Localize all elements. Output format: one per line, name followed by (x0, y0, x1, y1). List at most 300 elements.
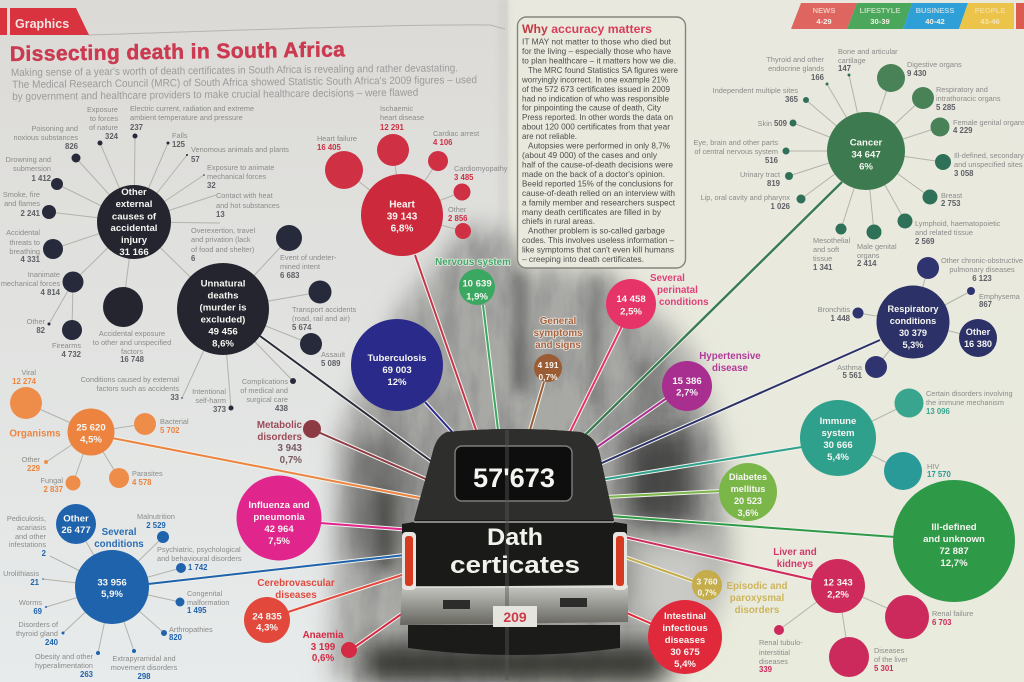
bubble: metabolic disorders: Metabolic (257, 420, 302, 431)
bubble: influenza and pneumonia: 7,5% (268, 536, 290, 547)
hub: heart (361, 174, 443, 256)
labels: several conditions: 820 (169, 633, 183, 642)
labels: respiratory: pulmonary diseases (949, 265, 1015, 274)
callout: why accuracy matters: a family member and researchers suspect (522, 197, 676, 207)
labels: external causes: mechanical forces (207, 172, 267, 181)
labels: heart: 2 856 (448, 214, 468, 223)
hub: liver: 12 343 (823, 578, 853, 588)
bubble: hypertensive disease: 2,7% (676, 388, 698, 398)
labels: cancer: 9 430 (907, 69, 927, 78)
line: intestinal (620, 610, 652, 624)
line: several conditions (148, 555, 405, 584)
callout: why accuracy matters: Press reported. In other words the data on (522, 112, 673, 122)
labels: external causes: Accidental (6, 228, 40, 237)
labels: external causes: 4 331 (20, 255, 41, 264)
hub: unnatural deaths: 49 456 (208, 326, 238, 338)
labels: several conditions: acariasis (17, 523, 46, 532)
bubble: nervous system: 10 639 (462, 278, 492, 290)
hub: heart: 6,8% (391, 224, 414, 234)
bubble: hypertensive disease (662, 351, 761, 411)
labels: unnatural deaths: Event of undeter- (280, 253, 336, 262)
labels: cancer: Respiratory and (936, 85, 988, 94)
labels: respiratory: Asthma (837, 363, 862, 372)
labels: external causes: Poisoning and (31, 124, 78, 133)
bubble: accidental exposure (93, 287, 171, 364)
labels: liver: 6 703 (932, 618, 952, 627)
licence plate: 209 (503, 609, 527, 625)
labels: cancer: 4 229 (953, 126, 973, 135)
labels: cancer: Eye, brain and other parts (693, 138, 778, 147)
hearse (400, 429, 628, 680)
labels: several conditions: 1 742 (188, 563, 208, 572)
labels: unnatural deaths: surgical care (246, 395, 288, 404)
line: heart (415, 255, 476, 430)
line: nervous system (483, 305, 498, 430)
callout: why accuracy matters: made on the back of a doctor's opinion. (522, 169, 665, 179)
licence plate (493, 606, 537, 627)
labels: external causes: to forces (90, 114, 118, 123)
bubble: episodic and paroxysmal disorders: disorders (735, 605, 780, 616)
bubble: cerebrovascular diseases: diseases (275, 590, 317, 601)
labels: unnatural deaths: 33 (170, 393, 180, 402)
hub: heart: 39 143 (387, 212, 418, 222)
navigation tabs: BUSINESS (916, 6, 954, 15)
hub: cancer: 34 647 (851, 150, 881, 160)
labels: several conditions: Pediculosis, (7, 514, 46, 523)
callout: why accuracy matters: Another problem is so-called garbage (528, 226, 665, 236)
line: unnatural deaths (260, 336, 432, 462)
labels: unnatural deaths: Assault (321, 350, 345, 359)
labels: several conditions: Worms (19, 598, 42, 607)
line: diabetes (605, 491, 722, 497)
labels: external causes: of food and shelter) (191, 245, 254, 254)
bubble: general symptoms and signs: 4 191 (538, 360, 558, 370)
labels: external causes: noxious substances (13, 133, 78, 142)
bubble: accidental exposure: to other and unspecified (93, 338, 171, 347)
hub: other external causes: external (116, 199, 152, 210)
panel: immune system (800, 388, 1013, 490)
bubble: influenza and pneumonia (236, 476, 322, 560)
labels: cancer: and unspecified sites (954, 160, 1023, 169)
labels: external causes: Exposure to animate (207, 163, 274, 172)
hub: organisms: 4,5% (80, 434, 102, 446)
line: cancer (582, 182, 842, 438)
labels: cancer: 3 058 (954, 169, 974, 178)
bubble: accidental exposure: Accidental exposure (99, 329, 165, 338)
labels: several conditions: hyperalimentation (35, 661, 93, 670)
bubble: nervous system (435, 257, 511, 305)
bubble: hypertensive disease: disease (712, 363, 749, 374)
labels: several conditions: Several (102, 527, 136, 538)
callout: why accuracy matters: cause-of-death relied on an interview with (522, 188, 675, 198)
bubble: diabetes mellitus: Diabetes (729, 472, 767, 482)
labels: external causes: Falls (172, 131, 188, 140)
labels: organisms: 5 702 (160, 426, 180, 435)
labels: cancer: tissue (813, 254, 832, 263)
labels: cancer: and soft (813, 245, 839, 254)
labels: heart: 3 485 (454, 173, 474, 182)
labels: cancer: intrathoracic organs (936, 94, 1001, 103)
labels: unnatural deaths: Conditions caused by external (81, 375, 179, 384)
labels: several conditions: movement disorders (111, 663, 178, 672)
bubble: episodic and paroxysmal disorders: 3 760 (697, 576, 717, 586)
callout: why accuracy matters (518, 17, 686, 268)
labels: cancer: Thyroid and other (766, 55, 824, 64)
labels: organisms (9, 368, 189, 494)
bubble: general symptoms and signs: 0,7% (538, 372, 558, 382)
labels: cancer: 1 341 (813, 263, 833, 272)
callout: why accuracy matters: Beeld reported 15% of the conclusions for (522, 178, 673, 188)
hub: immune: 5,4% (827, 452, 849, 463)
bubble: several perinatal conditions: conditions (659, 297, 709, 308)
labels: cancer: organs (857, 251, 880, 260)
bubble: diabetes mellitus: 3,6% (738, 508, 758, 518)
labels: heart: Cardiac arrest (433, 129, 479, 138)
line: tuberculosis (425, 402, 454, 434)
callout: why accuracy matters: like symptoms that can't even kill humans (522, 245, 674, 255)
labels: organisms: Viral (21, 368, 36, 377)
bubble: several perinatal conditions: Several (650, 273, 685, 284)
header rule (88, 25, 505, 35)
bubble: hypertensive disease: Hypertensive (699, 351, 761, 362)
labels: several conditions: 2 529 (146, 521, 166, 530)
labels: heart: 16 405 (317, 143, 342, 152)
hub: other external causes: Other (121, 187, 147, 198)
labels: liver: Liver and (773, 547, 817, 558)
hub: several conditions: 33 956 (97, 578, 127, 588)
labels: unnatural deaths: mined intent (280, 262, 320, 271)
bubble: other respiratory: Other (966, 327, 990, 337)
labels: several conditions: Congenital (187, 589, 222, 598)
labels: external causes: Other (27, 317, 45, 326)
line: hypertensive (590, 398, 667, 452)
labels: cancer: Breast (941, 191, 962, 200)
callout: why accuracy matters: of the 572 673 certificates issued in 2009 (522, 84, 670, 94)
hub: other external causes (97, 185, 171, 259)
labels: cancer: 819 (767, 179, 781, 188)
bubble: metabolic disorders: 0,7% (280, 455, 302, 466)
labels: unnatural deaths: self-harm (195, 396, 226, 405)
labels: external causes: 32 (207, 181, 216, 190)
bubble: accidental exposure: factors (121, 347, 143, 356)
callout: why accuracy matters: many death certificates are filled in by (522, 207, 662, 217)
intro text: The Medical Research Council (MRC) of South Africa showed Statistic South Africa's 2009 figures – used (12, 74, 477, 91)
hub: respiratory: 30 379 (899, 328, 927, 338)
bubble: anaemia: 3 199 (311, 642, 336, 653)
callout: why accuracy matters: codes. This involves useless information – (522, 235, 674, 245)
bubble: episodic and paroxysmal disorders: Episodic and (727, 581, 787, 592)
labels: external causes (1, 104, 289, 359)
bubble: anaemia: Anaemia (303, 630, 343, 641)
labels: external causes: Electric current, radiation and extreme (130, 104, 254, 113)
intro text (11, 62, 477, 103)
navigation tabs: 40-42 (925, 17, 945, 26)
callout: why accuracy matters: Autopsies were performed in only 8,7% (528, 141, 670, 151)
labels: external causes: Inanimate (28, 270, 60, 279)
navigation tabs: NEWS (813, 6, 835, 15)
labels: heart (317, 104, 508, 223)
labels: heart: Heart failure (317, 134, 357, 143)
labels: several conditions: Obesity and other (35, 652, 93, 661)
labels: several conditions: Disorders of (18, 620, 58, 629)
labels: heart: Cardiomyopathy (454, 164, 507, 173)
labels: external causes: 237 (130, 123, 143, 132)
labels: external causes: Drowning and (6, 155, 51, 164)
bubble: ill-defined and unknown: 72 887 (939, 546, 969, 557)
bubble: anaemia: 0,6% (312, 653, 334, 664)
bubble: general symptoms and signs: General (540, 316, 576, 327)
hub: unnatural deaths: (murder is (200, 302, 246, 314)
labels: several conditions: Arthropathies (169, 625, 213, 634)
labels: cancer: and related tissue (915, 228, 973, 237)
labels: immune: 13 096 (926, 407, 951, 416)
labels: cancer: 2 414 (857, 259, 877, 268)
hub: several conditions: 5,9% (101, 589, 123, 600)
labels: cancer: 365 (785, 95, 799, 104)
labels: several conditions: Psychiatric, psychological (157, 545, 241, 554)
labels: several conditions: 69 (33, 607, 43, 616)
labels: several conditions: 263 (80, 670, 94, 679)
labels: unnatural deaths: 438 (275, 404, 289, 413)
labels: external causes: and hot substances (216, 201, 280, 210)
labels: external causes: Venomous animals and plants (191, 145, 289, 154)
labels: external causes: threats to (9, 238, 40, 247)
labels: respiratory: 6 123 (972, 274, 992, 283)
panel: other external causes of accidental injury (1, 104, 289, 364)
hub: cancer: Cancer (850, 138, 882, 148)
labels: cancer: of central nervous system (694, 147, 778, 156)
bubble: anaemia (303, 630, 357, 664)
labels: external causes: 826 (65, 142, 79, 151)
labels: unnatural deaths: of medical and (240, 386, 288, 395)
bubble: metabolic disorders (257, 420, 321, 466)
labels: cancer: Mesothelial (813, 236, 850, 245)
labels: liver: diseases (759, 657, 788, 666)
labels: unnatural deaths (81, 253, 357, 414)
labels: external causes: Contact with heat (216, 191, 273, 200)
bubble: other: Other (63, 514, 89, 524)
labels: respiratory: 1 448 (830, 314, 851, 323)
labels: cancer: 147 (838, 64, 851, 73)
labels: several conditions: and other (15, 532, 47, 541)
labels: organisms: 12 274 (12, 377, 37, 386)
hearse text: Dath (487, 524, 543, 551)
hub: other external causes: accidental (111, 223, 157, 234)
hub: other external causes: causes of (112, 212, 157, 222)
labels: external causes: 2 241 (20, 209, 41, 218)
intro text: Making sense of a year's worth of death certificates in South Africa is revealing and rather devastating. (11, 62, 458, 79)
bubble: influenza and pneumonia: pneumonia (253, 512, 305, 523)
bubble: cerebrovascular diseases (244, 578, 335, 643)
navigation tabs (791, 3, 1024, 29)
labels: unnatural deaths: factors such as accidents (97, 384, 179, 393)
labels: unnatural deaths: 6 683 (280, 271, 300, 280)
labels: cancer: Skin 509 (758, 119, 788, 128)
hub: respiratory (876, 286, 950, 358)
labels: external causes: of nature (89, 123, 118, 132)
bubble: episodic and paroxysmal disorders (692, 570, 787, 616)
labels: several conditions: Urolithiasis (3, 569, 39, 578)
callout: why accuracy matters: are not reliable. (522, 131, 577, 141)
labels: liver: 5 301 (874, 664, 894, 673)
labels: immune: 17 570 (927, 470, 952, 479)
labels: external causes: Overexertion, travel (191, 226, 255, 235)
navigation tabs: 30-39 (870, 17, 890, 26)
labels: unnatural deaths: (road, rail and air) (292, 314, 350, 323)
labels: cancer: 166 (811, 73, 825, 82)
bubble: cerebrovascular diseases: Cerebrovascular (257, 578, 335, 589)
labels: liver: Renal failure (932, 609, 973, 618)
hub: unnatural deaths: 8,6% (212, 338, 234, 350)
labels: immune: Certain disorders involving (926, 389, 1013, 398)
bubble: general symptoms and signs (534, 316, 583, 382)
labels: unnatural deaths: Intentional (192, 387, 226, 396)
labels: liver (759, 547, 973, 674)
labels: several conditions: 2 (42, 549, 47, 558)
labels: immune: the immune mechanism (926, 398, 1004, 407)
labels: organisms: Other (22, 455, 40, 464)
labels: liver: Renal tubulo- (759, 638, 803, 647)
labels: external causes: 4 814 (40, 288, 61, 297)
bubble: intestinal infectious diseases: infectious (662, 623, 708, 634)
labels: cancer: endocrine glands (768, 64, 824, 73)
labels: liver: 339 (759, 665, 773, 674)
labels: unnatural deaths: Transport accidents (292, 305, 356, 314)
bubble: general symptoms and signs: and signs (535, 340, 581, 351)
labels: external causes: breathing (9, 247, 40, 256)
labels: organisms: 2 837 (43, 485, 63, 494)
navigation tabs: 4-29 (816, 17, 832, 26)
labels: several conditions: thyroid gland (16, 629, 58, 638)
hub: liver: 2,2% (827, 590, 849, 600)
bubble: tuberculosis: 69 003 (382, 365, 412, 376)
callout: why accuracy matters: half of the cause-of-death decisions were (522, 160, 673, 170)
labels: external causes: ambient temperature and pressure (130, 113, 243, 122)
labels: cancer: Lymphoid, haematopoietic (915, 219, 1000, 228)
bubble: intestinal infectious diseases: 30 675 (670, 647, 700, 658)
bubble: several perinatal conditions: 14 458 (616, 294, 646, 305)
labels: organisms: Parasites (132, 469, 163, 478)
labels: heart: Other (448, 205, 466, 214)
bubble: intestinal infectious diseases: 5,4% (674, 659, 696, 670)
hub: respiratory: Respiratory (887, 304, 939, 314)
labels: respiratory: 5 561 (842, 371, 863, 380)
hub: other external causes: injury (121, 235, 148, 246)
callout: why accuracy matters: had no indication of who was responsible (522, 93, 669, 103)
intro text: by government and healthcare providers to make crucial healthcare decisions – were flawed (12, 87, 418, 103)
callout: why accuracy matters: IT MAY not matter to those who died but (522, 36, 672, 46)
callout: why accuracy matters: – creeping into death certificates. (522, 254, 644, 264)
labels: respiratory: 867 (979, 300, 992, 309)
hub: organisms (68, 408, 114, 456)
line: episodic (622, 556, 696, 582)
panel: several conditions (3, 504, 242, 681)
navigation tabs: 43-46 (980, 17, 1000, 26)
line: organisms (112, 438, 420, 498)
labels: external causes: 4 732 (61, 350, 82, 359)
panel: heart (317, 104, 508, 256)
labels: liver: Diseases (874, 646, 904, 655)
labels: cancer: Male genital (857, 242, 897, 251)
hub: other external causes: 31 166 (119, 247, 149, 258)
bubble: other respiratory: 16 380 (964, 339, 992, 349)
labels: unnatural deaths: Complications (242, 377, 288, 386)
hub: unnatural deaths: Unnatural (201, 278, 245, 290)
labels: external causes: and flames (4, 199, 40, 208)
line: anaemia (352, 608, 410, 649)
line: respiratory (595, 340, 880, 466)
labels: external causes: 57 (191, 155, 200, 164)
panel: respiratory conditions (818, 256, 1023, 380)
taillights (402, 532, 627, 590)
callout: why accuracy matters: Why accuracy matters (522, 22, 652, 36)
navigation tabs: PEOPLE (975, 6, 1005, 15)
callout: why accuracy matters: for the living – especially those who have (522, 46, 671, 56)
labels: respiratory: Bronchitis (818, 305, 850, 314)
labels: organisms: Fungal (41, 476, 63, 485)
labels: several conditions: Malnutrition (137, 512, 175, 521)
bubble: other respiratory (959, 319, 997, 357)
panel: liver and kidneys (759, 547, 973, 677)
callout: why accuracy matters: The MRC found Statistics SA figures were (528, 65, 678, 75)
labels: several conditions: 298 (137, 672, 151, 681)
hub: cancer: 6% (859, 162, 873, 172)
callout: why accuracy matters: to plan healthcare – it matters how we die. (522, 55, 676, 65)
hub: unnatural deaths: deaths (208, 290, 238, 302)
labels: cancer: 2 753 (941, 199, 961, 208)
panel: organisms (9, 368, 189, 494)
line: liver (620, 536, 814, 580)
labels: respiratory: Emphysema (979, 292, 1020, 301)
line: ill-defined (610, 516, 895, 537)
bubble: tuberculosis: 12% (387, 377, 407, 388)
labels: external causes: 6 (191, 254, 196, 263)
labels: cancer: 5 285 (936, 103, 956, 112)
labels: heart: 12 291 (380, 123, 405, 132)
bubble: ill-defined and unknown: and unknown (923, 534, 985, 545)
bubble: nervous system: Nervous system (435, 257, 511, 268)
line: general symptoms (530, 382, 544, 430)
section tab: Graphics (0, 8, 89, 35)
panel: unnatural deaths (81, 225, 357, 414)
bubble: diabetes mellitus: mellitus (731, 484, 765, 494)
bubble: metabolic disorders: 3 943 (277, 443, 303, 454)
hub: unnatural deaths: excluded) (201, 314, 245, 326)
callout: why accuracy matters: worryingly incorrect. In one example 21% (521, 74, 668, 84)
labels: cancer: Digestive organs (907, 60, 962, 69)
labels: respiratory (818, 256, 1023, 380)
labels: external causes: 13 (216, 210, 225, 219)
hub: cancer (827, 112, 905, 190)
hearse text (450, 524, 580, 579)
hub: immune: system (821, 428, 855, 439)
callout: why accuracy matters: (about 49 000) of the cases and only (522, 150, 658, 160)
bubble: several perinatal conditions: 2,5% (620, 306, 642, 318)
labels: several conditions: 240 (45, 638, 59, 647)
labels: unnatural deaths: 5 674 (292, 323, 312, 332)
bubble: diabetes mellitus: 20 523 (734, 496, 762, 506)
labels: several conditions: infestations (9, 540, 46, 549)
labels: external causes: Smoke, fire (3, 190, 40, 199)
photo: tree background (332, 225, 730, 682)
bubble: intestinal infectious diseases: Intestinal (664, 611, 706, 622)
hub: immune: 30 666 (823, 440, 853, 451)
labels: cancer (693, 47, 1024, 272)
labels: cancer: Female genital organs (953, 118, 1024, 127)
hub: immune (800, 400, 876, 476)
labels: cancer: 516 (765, 156, 779, 165)
hub: organisms: 25 620 (76, 422, 106, 434)
